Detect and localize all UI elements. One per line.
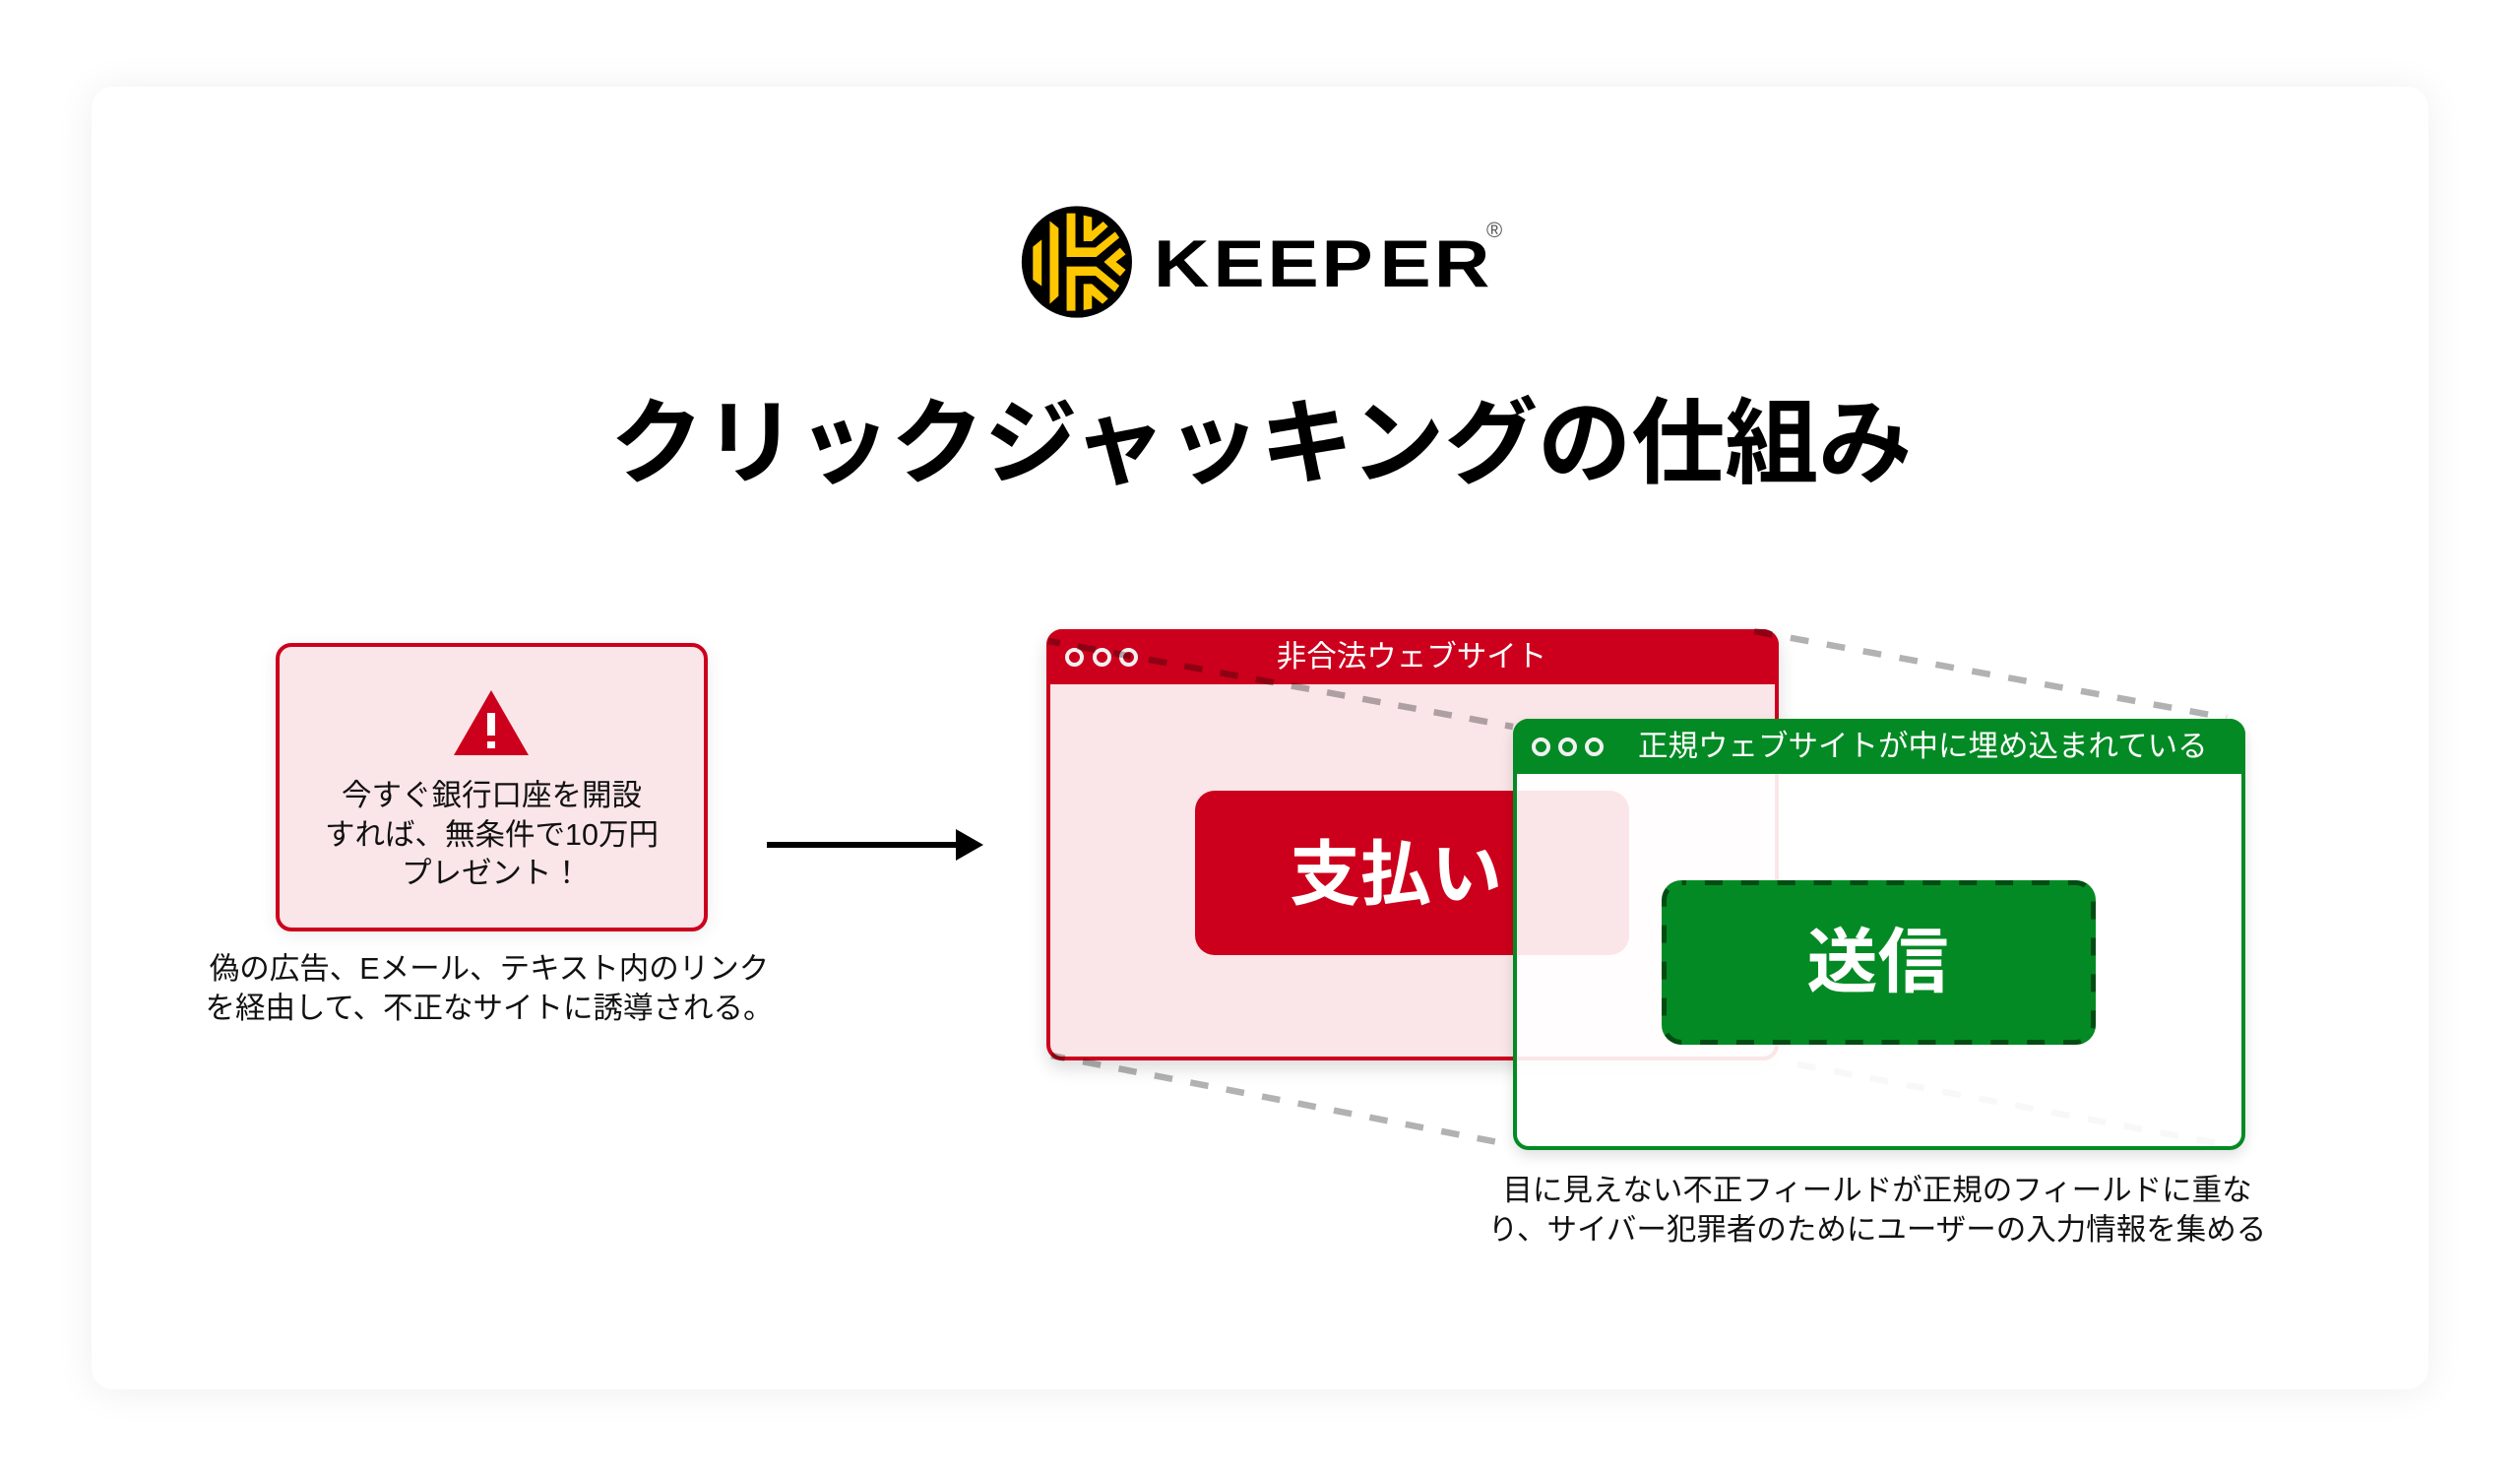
caption: overlay explanation: り、サイバー犯罪者のためにユーザーの入力情報を集める xyxy=(1488,1213,2266,1247)
button label: 支払い xyxy=(1290,836,1502,915)
alert text: すれば、無条件で10万円 xyxy=(325,817,659,851)
window dots xyxy=(1065,648,1138,667)
window title: 正規ウェブサイトが中に埋め込まれている xyxy=(1638,730,2208,763)
panel: legitimate website window xyxy=(1513,719,2245,1150)
caption: fake ad: 偽の広告、Eメール、テキスト内のリンク xyxy=(210,952,769,986)
caption: fake ad: を経由して、不正なサイトに誘導される。 xyxy=(205,991,774,1024)
button: submit xyxy=(1662,880,2095,1045)
panel: fake ad alert box xyxy=(276,643,708,931)
button label: 送信 xyxy=(1807,924,1949,1002)
window header xyxy=(1513,719,2245,774)
icon: Keeper emblem xyxy=(1022,206,1132,318)
window dots xyxy=(1532,738,1604,756)
alert text: プレゼント！ xyxy=(402,857,582,890)
wordmark: KEEPER xyxy=(1154,226,1489,301)
caption: fake ad xyxy=(205,952,774,1024)
alert text xyxy=(325,779,659,890)
button: payment xyxy=(1195,791,1629,955)
title: クリックジャッキングの仕組み xyxy=(610,392,1912,496)
caption: overlay explanation xyxy=(1488,1174,2266,1247)
panel: illegal website window xyxy=(1046,629,1779,1060)
window header xyxy=(1046,629,1779,684)
dashed outline xyxy=(1662,880,2096,1045)
registered mark: ® xyxy=(1486,218,1502,242)
window title: 非合法ウェブサイト xyxy=(1277,640,1546,673)
caption: overlay explanation: 目に見えない不正フィールドが正規のフィールドに重な xyxy=(1502,1174,2252,1207)
alert text: 今すぐ銀行口座を開設 xyxy=(342,779,642,812)
logo: Keeper xyxy=(1022,206,1502,318)
icon: warning triangle xyxy=(454,690,529,755)
arrow xyxy=(767,829,983,861)
